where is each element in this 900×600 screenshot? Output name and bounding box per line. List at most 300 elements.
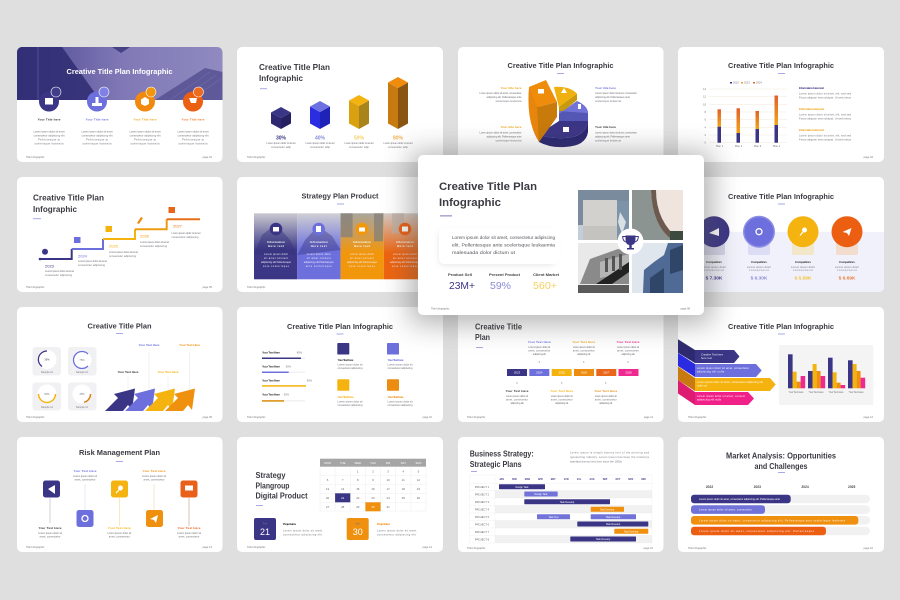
text box: elit. Pellentesque ante scelerisque leukaemia	[452, 242, 556, 248]
panel: 3D pie slide	[458, 47, 664, 162]
panel: staircase timeline slide: page 05	[203, 285, 213, 289]
heading	[475, 322, 523, 348]
competitor labels: Lorem ipsum dolor	[747, 265, 771, 269]
stacked bar chart: Plan 1	[716, 144, 724, 148]
panel: risk management slide: page 13	[203, 545, 213, 549]
step labels: 2026	[140, 234, 150, 238]
panel: isometric bars slide	[237, 47, 443, 162]
panel: horizontal timeline slide: Title Infographic	[467, 415, 486, 419]
timeline labels: Lorem ipsum dolor sit	[573, 345, 595, 349]
panel: isometric bars slide: Lorem ipsum dolor sit amet	[266, 141, 296, 145]
pie labels: scelerisque leukemia	[595, 138, 622, 142]
staircase line	[39, 219, 200, 260]
year labels: 2025	[848, 485, 856, 489]
date cards: Lorem ipsum dolor sit amet,	[283, 528, 323, 532]
legend: 2024	[756, 80, 762, 84]
progress bars: 50%	[284, 392, 290, 396]
column text: Lorem ipsum dolor	[393, 253, 417, 256]
panel: featured slide	[418, 155, 704, 315]
date cards: Projectview	[283, 522, 297, 526]
gantt table: Task Develop	[606, 523, 621, 526]
stacked bar chart: Plan 4	[773, 144, 781, 148]
3D pie chart	[528, 80, 588, 147]
calendar: 14	[341, 487, 345, 491]
date cards: consectetur adipiscing elit	[283, 532, 322, 536]
column text: adipiscing elit Pellentesque	[261, 261, 292, 264]
bar chart: Your Text Here	[808, 390, 824, 394]
progress bars: Your Text Here	[262, 392, 280, 396]
labels: Lorem ipsum dolor sit amet	[178, 130, 209, 134]
calendar: 6	[327, 478, 329, 482]
competitor labels: Competitors	[706, 260, 722, 264]
timeline blocks: 2028	[625, 370, 632, 374]
timeline labels: Lorem ipsum dolor sit	[551, 394, 573, 398]
progress bars: 60%	[286, 364, 292, 368]
column text: ante scelerisque	[392, 265, 419, 268]
column icons	[270, 223, 411, 235]
pie labels: Lorem ipsum dolor sit amet, consectetur	[480, 130, 522, 134]
heading: Creative Title Plan	[439, 181, 537, 193]
column text: sit amet consect	[307, 257, 331, 260]
timeline labels: amet, consectetur	[506, 398, 528, 402]
percent labels: 80%	[393, 136, 404, 142]
calendar: 7	[342, 478, 344, 482]
gantt table: PROJECT 4	[475, 508, 490, 512]
column text: adipiscing elit Pellentesque	[390, 261, 421, 264]
calendar: 20	[326, 496, 329, 500]
numbered squares: Your Text here	[388, 358, 404, 362]
numbered squares: Your Text here	[338, 358, 354, 362]
calendar: 29	[356, 505, 360, 509]
panel: stacked bar chart slide	[678, 47, 884, 162]
calendar: 28	[341, 505, 345, 509]
heading	[33, 192, 104, 219]
pie labels: adipiscing elit. Pellentesque ante	[595, 95, 630, 99]
labels: Lorem ipsum dolor sit	[177, 531, 201, 535]
progress tracks: Lorem ipsum dolor sit amet, consectetur adipiscing elit. Pellentesque ante scelerisque leukemia	[699, 519, 846, 522]
calendar: 12	[417, 478, 420, 482]
step labels: consectetur adipiscing	[172, 235, 199, 239]
calendar: 19	[417, 487, 420, 491]
heading: Digital Product	[256, 492, 308, 501]
legend: 2023	[744, 80, 750, 84]
labels: Your Title here	[86, 118, 109, 122]
labels: amet, consectetur	[74, 478, 96, 482]
panel: stacked bar chart slide: page 04	[864, 155, 874, 159]
labels: Lorem ipsum dolor sit	[107, 531, 132, 535]
intro text: standard dummy text ever since the 1500s	[570, 460, 623, 464]
donut tiles	[32, 347, 96, 410]
timeline blocks: 2024	[536, 370, 543, 374]
timeline labels: Your Text Here	[616, 340, 640, 344]
panel: featured slide: page 08	[681, 306, 691, 310]
numbered squares: Your Text here	[338, 395, 354, 399]
heading: Creative Title Plan Infographic	[287, 322, 393, 331]
timeline labels: Your Text Here	[594, 389, 617, 393]
column text: sit amet consect	[393, 257, 417, 260]
stacked bar chart: 2	[705, 133, 707, 137]
calendar: WED	[355, 461, 361, 465]
gantt table: PROJECT 3	[475, 500, 490, 504]
bar chart: Your Text Here	[788, 390, 804, 394]
pie labels: Your title here	[500, 86, 522, 90]
panel: horizontal timeline slide: page 11	[644, 415, 654, 419]
labels	[38, 469, 201, 538]
step labels: consectetur adipiscing	[140, 244, 168, 248]
side text: Fusce aliquam erat volutpat. Ut sed metus	[799, 96, 852, 100]
heading: Plan	[475, 333, 490, 342]
calendar: THU	[370, 461, 376, 465]
pie labels: adipiscing elit. Pellentesque ante	[486, 95, 522, 99]
column text: Lorem ipsum dolor	[307, 253, 331, 256]
labels: Lorem ipsum dolor sit amet	[82, 130, 113, 134]
labels: Pellentesque at	[134, 138, 156, 142]
competitor labels: $ 5.59K	[795, 276, 812, 282]
competitor labels	[702, 260, 859, 282]
year labels	[706, 485, 856, 489]
labels: Lorem ipsum dolor sit	[73, 474, 97, 478]
labels: Pellentesque at	[86, 138, 108, 142]
side text: Fusce aliquam erat volutpat. Ut sed metus	[799, 116, 852, 120]
labels: Your Text Here	[74, 469, 97, 473]
panel: progress bars slide: Title Infographic	[247, 415, 266, 419]
side text: Information Here text	[799, 128, 824, 132]
date cards: Lorem ipsum dolor sit amet,	[377, 528, 417, 532]
gantt table: PROJECT 8	[475, 538, 490, 542]
gantt table: PROJECT 2	[475, 492, 490, 496]
icon squares	[43, 480, 198, 527]
year labels: 2023	[754, 485, 761, 489]
legend	[730, 80, 762, 84]
heading: Creative Title Plan	[259, 62, 330, 72]
year labels: 2022	[706, 485, 713, 489]
timeline labels: amet, consectetur	[595, 398, 617, 402]
trophy badge	[618, 228, 644, 254]
panel: risk management slide	[17, 437, 222, 552]
calendar: 23	[371, 496, 375, 500]
panel: gantt slide: page 15	[644, 546, 654, 550]
column text: Information	[396, 240, 414, 244]
percent labels: 40%	[315, 136, 326, 142]
heading: Risk Management Plan	[79, 448, 160, 457]
column text: Information	[310, 240, 328, 244]
timeline labels: Lorem ipsum dolor sit	[506, 394, 528, 398]
ribbon arrows	[678, 339, 776, 405]
timeline blocks: 2027	[603, 370, 610, 374]
numbered squares: Your Text here	[388, 395, 404, 399]
text box: Lorem ipsum dolor sit amet, consectetur adipiscing	[452, 235, 556, 240]
column text: adipiscing elit Pellentesque	[304, 261, 334, 264]
panel: isometric bars slide: Title Infographic	[247, 155, 266, 159]
timeline labels: adipiscing elit	[577, 352, 590, 356]
labels: Lorem ipsum dolor sit amet	[130, 130, 161, 134]
text box	[439, 228, 559, 265]
calendar: 1	[357, 470, 359, 474]
timeline labels: adipiscing elit	[533, 352, 546, 356]
arrows	[105, 388, 195, 411]
gantt table: MAR	[525, 478, 530, 481]
competitor labels: $ 6.69K	[839, 276, 856, 282]
panel: isometric bars slide: consectetur adip	[349, 145, 370, 149]
arrow connectors and labels	[118, 343, 200, 389]
step labels: Lorem ipsum dolor sit amet	[78, 259, 107, 263]
step labels: Lorem ipsum dolor sit amet	[140, 240, 169, 244]
heading: and Challenges	[754, 462, 808, 471]
calendar: 15	[356, 487, 360, 491]
numbered squares: Lorem ipsum dolor sit	[388, 363, 413, 367]
timeline labels: adipiscing elit	[622, 352, 635, 356]
ribbon arrows: adipiscing elit nulla	[697, 370, 725, 374]
heading: Creative Title Plan Infographic	[66, 67, 172, 76]
intro text: Lorem ipsum is simply dummy text of the printing and	[570, 450, 650, 454]
labels: consectetur adipiscing elit	[178, 134, 209, 138]
gantt table: PROJECT 6	[475, 522, 490, 526]
circle icons	[698, 216, 862, 255]
competitor labels: consectetur	[749, 268, 769, 272]
gantt table: JUN	[564, 479, 569, 481]
side text: Lorem ipsum dolor sit amet, elit. sed sed	[799, 92, 852, 96]
panel: isometric bars slide: consectetur adip	[310, 145, 330, 149]
competitor labels: Competitors	[795, 260, 811, 264]
heading: Infographic	[33, 204, 77, 214]
gantt table: Design Task	[535, 493, 548, 496]
timeline labels: amet, consectetur	[528, 348, 550, 352]
labels: amet, consectetur	[40, 534, 61, 538]
stacked bar chart: 12	[703, 95, 707, 99]
competitor labels: Lorem ipsum dolor	[702, 265, 726, 269]
intro text: typesetting industry. Lorem ipsum has been the industrys	[570, 455, 650, 459]
timeline labels: amet, consectetur	[617, 348, 639, 352]
column text: adipiscing elit Pellentesque	[347, 261, 378, 264]
panel: market analysis slide: Title Infographic	[688, 546, 707, 550]
gantt table: FEB	[512, 479, 517, 481]
photo grid	[578, 190, 683, 293]
pie labels: Your title here	[595, 125, 616, 129]
numbered squares: consectetur adipiscing	[338, 366, 363, 370]
column text: Here text	[397, 244, 413, 248]
calendar: 13	[326, 487, 329, 491]
calendar: 21	[341, 496, 345, 500]
intro text	[570, 450, 650, 464]
labels: Your Text Here	[38, 526, 62, 530]
date cards: 30	[353, 527, 363, 537]
panel: ribbon arrows and bars slide: page 12	[864, 415, 874, 419]
panel: isometric bars slide: consectetur adip	[271, 145, 292, 149]
numbered squares: consectetur adipiscing	[338, 403, 363, 407]
calendar: 22	[356, 496, 360, 500]
pie labels: scelerisque leukemia	[496, 138, 522, 142]
heading: Creative Title	[475, 322, 523, 332]
ribbon arrows: Lorem ipsum dolor sit amet, consect	[697, 395, 745, 398]
panel: staircase timeline slide: Title Infographic	[26, 285, 45, 289]
competitor labels: consectetur	[837, 268, 857, 272]
progress bars: Your Text Here	[262, 364, 280, 368]
timeline blocks: 2023	[514, 370, 521, 374]
calendar: 11	[402, 478, 405, 482]
pie labels: adipiscing elit. Pellentesque ante	[595, 134, 630, 138]
gantt table: Task Develop	[606, 516, 621, 519]
panel: market analysis slide	[678, 437, 884, 552]
stacked bar chart: 0	[705, 141, 707, 145]
donut tiles: 30%	[44, 358, 50, 362]
gantt table: DEC	[641, 479, 647, 481]
panel: donuts and arrows slide	[17, 307, 222, 422]
timeline labels: Your Text Here	[572, 340, 595, 344]
panel: strategy plan product slide: Title Infographic	[247, 285, 266, 289]
panel: featured slide: Title Infographic	[431, 306, 450, 310]
gantt table: OCT	[615, 479, 621, 481]
date cards: Projectview	[377, 522, 391, 526]
calendar: 10	[386, 478, 390, 482]
timeline labels: adipiscing elit	[599, 401, 612, 405]
labels: amet, consectetur	[178, 534, 200, 538]
heading: Creative Title Plan Infographic	[728, 192, 834, 201]
panel: header slide with four circles	[17, 47, 222, 162]
panel: calendar slide: page 14	[423, 545, 433, 549]
ribbon arrows: here text	[701, 357, 712, 360]
column text: Information	[267, 240, 285, 244]
timeline labels: Lorem ipsum dolor sit	[528, 345, 551, 349]
pie labels: adipiscing elit. Pellentesque ante	[486, 134, 522, 138]
labels: consectetur adipiscing elit	[82, 134, 113, 138]
competitor labels: Lorem ipsum dolor	[835, 265, 859, 269]
competitor labels: consectetur	[793, 268, 813, 272]
gantt table: PROJECT 7	[475, 530, 490, 534]
donut tiles: Sample txt	[41, 370, 53, 374]
arrow connectors and labels: Your Text Here	[118, 370, 139, 374]
pie labels: Lorem ipsum dolor sit amet, consectetur	[595, 91, 637, 95]
calendar: 3	[387, 470, 389, 474]
calendar: 25	[402, 496, 405, 500]
progress tracks: Lorem ipsum dolor sit amet, consectetur adipiscing elit. Pellentesque	[699, 530, 815, 533]
competitor labels: Competitors	[751, 260, 767, 264]
heading: Strategy Plan Product	[302, 192, 379, 200]
side text: Information Here text	[799, 107, 824, 111]
stats: 560+	[533, 280, 557, 292]
stacked bar chart	[703, 87, 787, 148]
gantt table: Task Text	[549, 516, 559, 519]
calendar: 2	[372, 470, 374, 474]
pie labels: scelerisque leukemia	[496, 99, 522, 103]
pie labels: Lorem ipsum dolor sit amet, consectetur	[595, 130, 637, 134]
percent labels: 30%	[276, 136, 287, 142]
stats: 59%	[490, 280, 511, 292]
numbered squares: Lorem ipsum dolor sit	[338, 400, 363, 404]
column text: Lorem ipsum dolor	[350, 253, 374, 256]
heading: Plangroup	[256, 482, 290, 490]
calendar: 30	[371, 505, 375, 509]
stacked bar chart: 14	[703, 87, 707, 91]
labels: amet, consectetur	[109, 534, 130, 538]
labels: Your Title here	[38, 118, 61, 122]
side text: Fusce aliquam erat volutpat. Ut sed metus	[799, 138, 852, 142]
calendar: 8	[357, 478, 359, 482]
competitor labels: Lorem ipsum dolor	[791, 265, 815, 269]
bar chart: Your Text Here	[848, 390, 864, 394]
arrow connectors and labels: Your Text Here	[179, 343, 200, 347]
panel: progress bars slide: page 10	[423, 415, 433, 419]
percent labels: 50%	[354, 136, 365, 142]
ribbon arrows: nulla est	[697, 384, 707, 388]
panel: ribbon arrows and bars slide	[678, 307, 884, 422]
date cards: 21	[260, 527, 270, 537]
gantt table: APR	[538, 478, 543, 481]
labels: Pellentesque at	[182, 138, 204, 142]
gantt table: Task Develop	[600, 508, 615, 511]
competitor labels: $ 7.30K	[706, 276, 723, 282]
step labels: Lorem ipsum dolor sit amet	[172, 231, 201, 235]
labels: consectetur adipiscing elit	[34, 134, 65, 138]
date cards	[254, 518, 417, 540]
pie labels: Lorem ipsum dolor sit amet, consectetur	[480, 91, 522, 95]
gantt table	[470, 475, 652, 543]
step labels: Lorem ipsum dolor sit amet	[109, 250, 138, 254]
competitor labels: Competitors	[839, 260, 855, 264]
pie labels: Your title here	[500, 125, 522, 129]
timeline labels: Your Text Here	[528, 340, 551, 344]
stacked bar chart: Plan 3	[754, 144, 762, 148]
progress bars: 90%	[307, 378, 313, 382]
progress bars: Your Text Here	[262, 350, 280, 354]
timeline blocks: 2026	[581, 370, 588, 374]
ribbon arrows: Lorem ipsum dolor sit amet, consectetur adipiscing elit	[697, 381, 763, 384]
column text: Here text	[311, 244, 327, 248]
heading: Creative Title Plan Infographic	[728, 322, 834, 331]
timeline labels: adipiscing elit	[555, 401, 568, 405]
competitor labels: $ 6.30K	[751, 276, 768, 282]
arrow connectors and labels: Your Text Here	[158, 370, 179, 374]
donut tiles: 75%	[79, 358, 85, 362]
stats: 23M+	[449, 280, 475, 292]
calendar: 9	[372, 478, 374, 482]
panel: progress bars slide	[237, 307, 443, 422]
text box: malesuada dolor dictum ut	[452, 250, 516, 255]
heading	[470, 450, 534, 472]
calendar: MON	[324, 461, 331, 465]
step labels: 2024	[78, 254, 88, 258]
step labels: consectetur adipiscing	[109, 254, 136, 258]
timeline blocks	[507, 361, 638, 384]
heading: Market Analysis: Opportunities	[726, 452, 837, 460]
column text: ante scelerisque	[263, 265, 290, 268]
side text: Information Here text	[799, 86, 824, 90]
pie labels: Your title here	[595, 86, 616, 90]
panel: risk management slide: Title Infographic	[26, 545, 45, 549]
step icons	[42, 207, 175, 255]
heading: Strategic Plans	[470, 460, 522, 469]
panel: calendar slide	[237, 437, 443, 552]
labels: scelerisque leukemia	[130, 142, 160, 146]
heading: Business Strategy:	[470, 450, 534, 458]
calendar	[320, 459, 426, 511]
heading: Creative Title Plan Infographic	[508, 61, 614, 70]
gantt table: MAY	[551, 478, 556, 481]
panel: competitors circles slide	[678, 177, 884, 292]
heading	[259, 62, 330, 89]
gantt table: Task Develop	[560, 501, 575, 504]
labels: Lorem ipsum dolor sit	[142, 474, 166, 478]
ribbon arrows: Lorem ipsum dolor sit amet, consectetur	[697, 367, 749, 370]
panel: horizontal timeline slide	[458, 307, 664, 422]
timeline labels: adipiscing elit	[510, 401, 524, 405]
donut tiles: 80%	[44, 392, 50, 396]
stats: Client Market	[533, 273, 560, 277]
labels: amet, consectetur	[144, 478, 165, 482]
numbered squares	[337, 343, 413, 407]
heading: Creative Title Plan	[88, 322, 152, 330]
panel: market analysis slide: page 16	[864, 546, 874, 550]
panel: calendar slide: Title Infographic	[247, 545, 266, 549]
